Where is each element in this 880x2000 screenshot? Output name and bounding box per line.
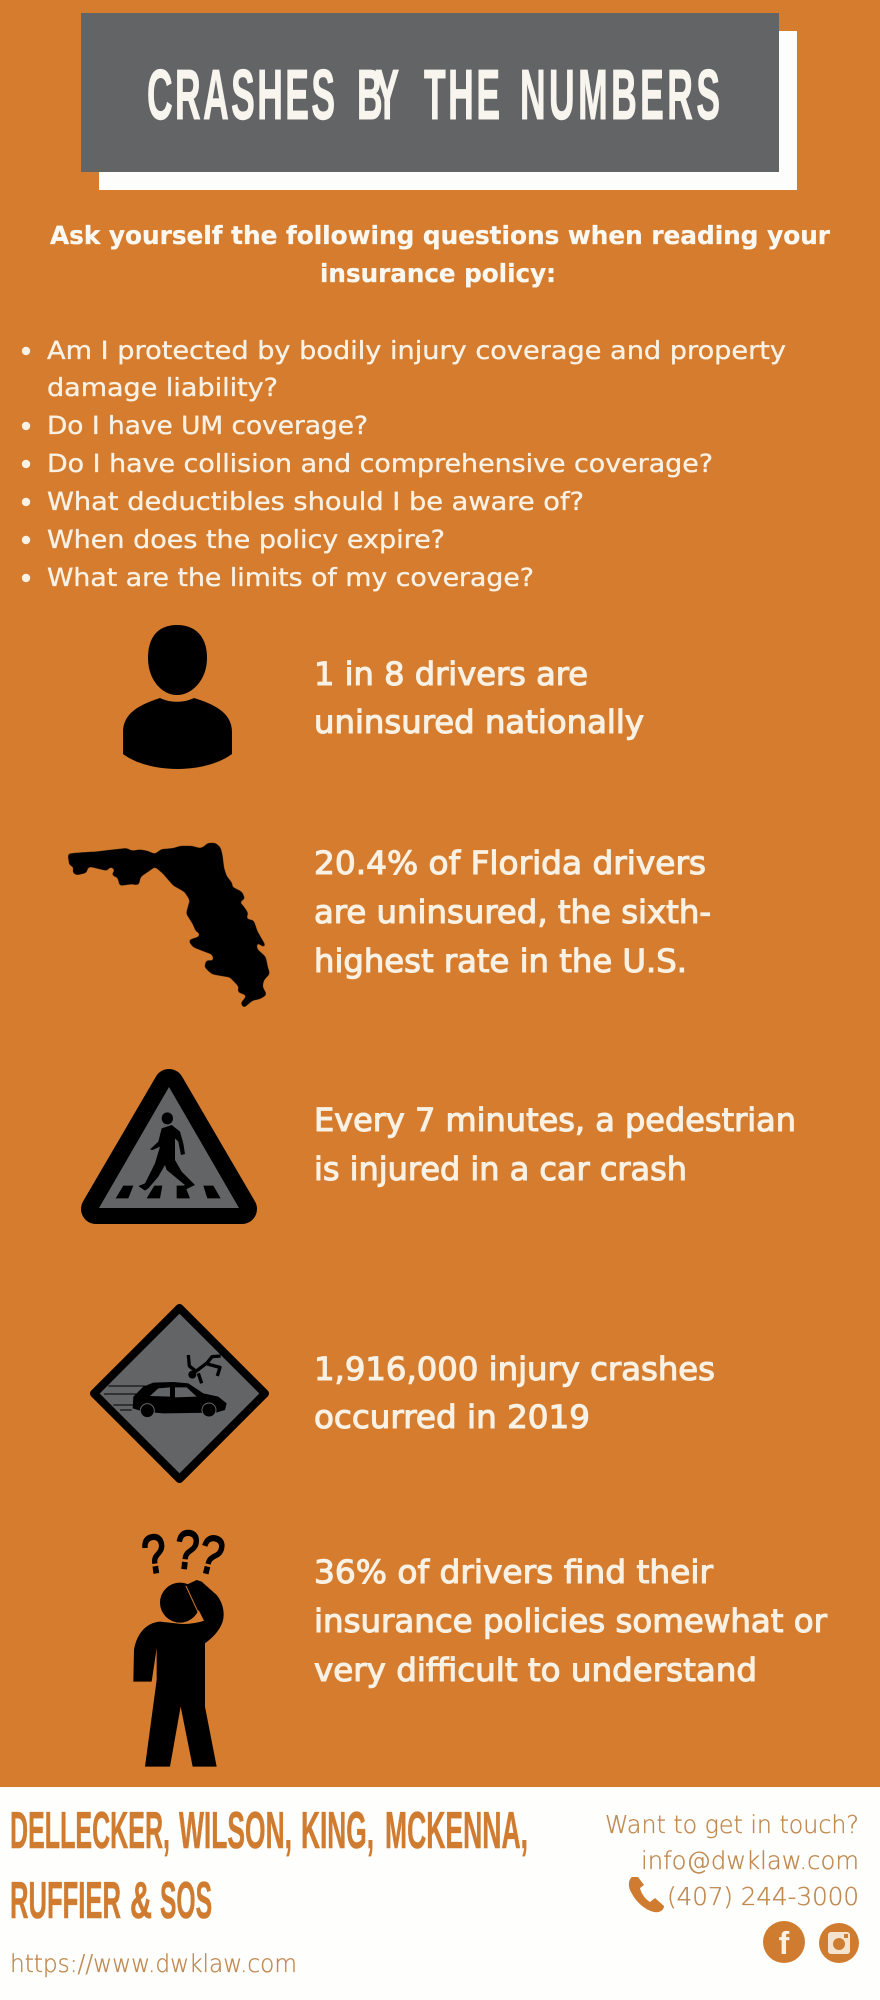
firm name: MCKENNA, — [385, 1802, 528, 1860]
firm name — [10, 1802, 528, 1930]
title banner — [81, 13, 797, 190]
intro heading — [50, 221, 831, 288]
stat: confusing policies — [133, 1519, 828, 1767]
title — [147, 56, 720, 135]
bulleted question list: Do I have UM coverage? — [47, 411, 368, 440]
icon: facebook — [763, 1921, 805, 1963]
stat text — [314, 844, 711, 980]
bulleted question list: damage liability? — [47, 373, 278, 402]
stat text: 36% of drivers find their — [314, 1553, 714, 1591]
stat text — [314, 1553, 828, 1689]
bulleted question list: What are the limits of my coverage? — [47, 563, 534, 592]
bulleted question list: Do I have collision and comprehensive coverage? — [47, 449, 713, 478]
icon: pedestrian crossing sign — [96, 1084, 242, 1209]
question marks: ? — [172, 1519, 202, 1581]
icon: facebook: f — [779, 1925, 790, 1961]
intro heading: insurance policy: — [320, 259, 556, 288]
stat text: uninsured nationally — [314, 703, 644, 741]
firm name: KING, — [301, 1802, 374, 1860]
title: BY — [357, 56, 399, 135]
stat text: 1,916,000 injury crashes — [314, 1350, 715, 1388]
contact details — [605, 1810, 859, 1911]
icon: phone — [629, 1877, 664, 1912]
firm name: DELLECKER, — [10, 1802, 170, 1860]
stat text — [314, 1350, 715, 1436]
icon: confused person — [133, 1519, 230, 1767]
stat text: is injured in a car crash — [314, 1150, 687, 1188]
bulleted question list: When does the policy expire? — [47, 525, 445, 554]
stat: uninsured nationally — [123, 625, 644, 769]
stat: Florida uninsured — [69, 844, 711, 1006]
stat text: Every 7 minutes, a pedestrian — [314, 1101, 796, 1139]
contact details: info@dwklaw.com — [641, 1846, 859, 1875]
icon: instagram — [819, 1923, 859, 1963]
icon: car crash diamond sign — [94, 1308, 265, 1479]
firm name: & — [130, 1872, 152, 1930]
stat text — [314, 655, 644, 741]
stat text: highest rate in the U.S. — [314, 942, 687, 980]
question marks: ? — [138, 1523, 170, 1586]
bulleted question list: What deductibles should I be aware of? — [47, 487, 584, 516]
stat text: insurance policies somewhat or — [314, 1602, 828, 1640]
question marks: ? — [192, 1523, 230, 1587]
website: https://www.dwklaw.com — [10, 1949, 297, 1978]
stat text: are uninsured, the sixth- — [314, 893, 711, 931]
bulleted question list: Am I protected by bodily injury coverage and property — [47, 336, 786, 365]
title: NUMBERS — [520, 56, 720, 135]
stat text — [314, 1101, 796, 1188]
stat text: occurred in 2019 — [314, 1398, 590, 1436]
firm name: SOS — [160, 1872, 212, 1930]
stat text: 20.4% of Florida drivers — [314, 844, 706, 882]
contact details: Want to get in touch? — [605, 1810, 859, 1839]
firm name: WILSON, — [179, 1802, 292, 1860]
firm name: RUFFIER — [10, 1872, 121, 1930]
intro heading: Ask yourself the following questions when reading your — [50, 221, 831, 250]
bulleted question list — [22, 336, 786, 592]
question marks — [138, 1519, 230, 1587]
title: THE — [424, 56, 500, 135]
stat: pedestrian injuries — [96, 1084, 796, 1209]
footer panel — [0, 1787, 880, 2000]
stat text: very difficult to understand — [314, 1651, 757, 1689]
icon: Florida map — [69, 844, 268, 1006]
title: CRASHES — [147, 56, 335, 135]
icon: person — [123, 625, 232, 769]
contact details: (407) 244-3000 — [667, 1882, 859, 1911]
stat: injury crashes — [94, 1308, 715, 1479]
stat text: 1 in 8 drivers are — [314, 655, 588, 693]
